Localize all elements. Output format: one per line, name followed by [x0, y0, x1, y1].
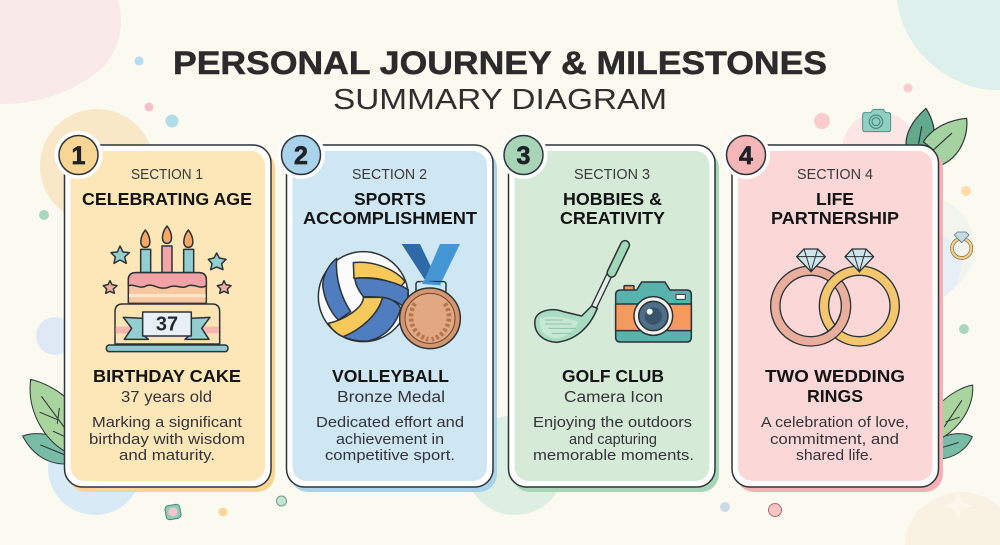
heading line 2: PARTNERSHIP — [771, 208, 899, 228]
icon: birthday cake: 37 — [156, 314, 178, 336]
badge 3: 3 — [517, 142, 530, 170]
item title: GOLF CLUB — [562, 366, 664, 386]
section label: SECTION 2 — [352, 167, 427, 183]
panel: section 1 — [64, 145, 275, 492]
description — [316, 415, 464, 464]
description: and capturing — [569, 432, 657, 448]
item title: TWO WEDDING — [765, 366, 905, 386]
heading: LIFE — [816, 189, 854, 209]
panel: section 4 — [732, 145, 943, 492]
badge 3 — [500, 131, 548, 179]
heading: HOBBIES & — [563, 189, 662, 209]
badge 2 — [277, 131, 325, 179]
description — [89, 415, 245, 464]
section label: SECTION 4 — [797, 167, 873, 183]
heading: CELEBRATING AGE — [82, 189, 252, 209]
item subtitle: Bronze Medal — [337, 389, 445, 406]
icon: small gem tile — [164, 504, 182, 520]
section label: SECTION 1 — [131, 167, 203, 183]
item title: BIRTHDAY CAKE — [93, 366, 241, 386]
icon: volleyball — [318, 252, 408, 342]
description: commitment, and — [770, 432, 899, 448]
description — [533, 415, 694, 464]
icon: leaves top right — [906, 108, 967, 165]
description: competitive sport. — [325, 448, 455, 464]
item subtitle: 37 years old — [121, 389, 212, 406]
icon: small camera — [863, 109, 891, 132]
badge 4 — [722, 131, 770, 179]
badge 1 — [54, 131, 102, 179]
badge 4: 4 — [739, 142, 753, 170]
icon: leaves bottom right — [938, 385, 973, 459]
subtitle: SUMMARY DIAGRAM — [333, 84, 667, 116]
description: shared life. — [796, 448, 873, 464]
icon: golf club — [535, 245, 625, 342]
description: Marking a significant — [92, 415, 242, 431]
item title: VOLLEYBALL — [332, 366, 449, 386]
description: Dedicated effort and — [316, 415, 464, 431]
title: PERSONAL JOURNEY & MILESTONES — [173, 45, 827, 81]
description: memorable moments. — [533, 448, 694, 464]
item title line 2: RINGS — [807, 386, 863, 406]
description — [761, 415, 909, 464]
panel: section 3 — [508, 145, 719, 492]
heading line 2: ACCOMPLISHMENT — [303, 208, 477, 228]
panel: section 2 — [286, 145, 497, 492]
decorative dots — [39, 56, 971, 516]
heading: SPORTS — [354, 189, 426, 209]
icon: camera — [616, 282, 691, 342]
heading line 2: CREATIVITY — [560, 208, 665, 228]
icon: leaves bottom left — [23, 379, 68, 464]
badge 1: 1 — [72, 142, 86, 170]
description: A celebration of love, — [761, 415, 909, 431]
icon: small ring — [952, 232, 971, 258]
icon: bronze medal — [400, 244, 460, 349]
section label: SECTION 3 — [574, 167, 650, 183]
icon: birthday cake — [103, 226, 231, 352]
description: and maturity. — [119, 448, 215, 464]
description: achievement in — [336, 432, 444, 448]
badge 2: 2 — [294, 142, 308, 170]
icon: wedding rings — [775, 249, 895, 341]
description: birthday with wisdom — [89, 432, 245, 448]
description: Enjoying the outdoors — [533, 415, 692, 431]
item subtitle: Camera Icon — [564, 389, 663, 406]
